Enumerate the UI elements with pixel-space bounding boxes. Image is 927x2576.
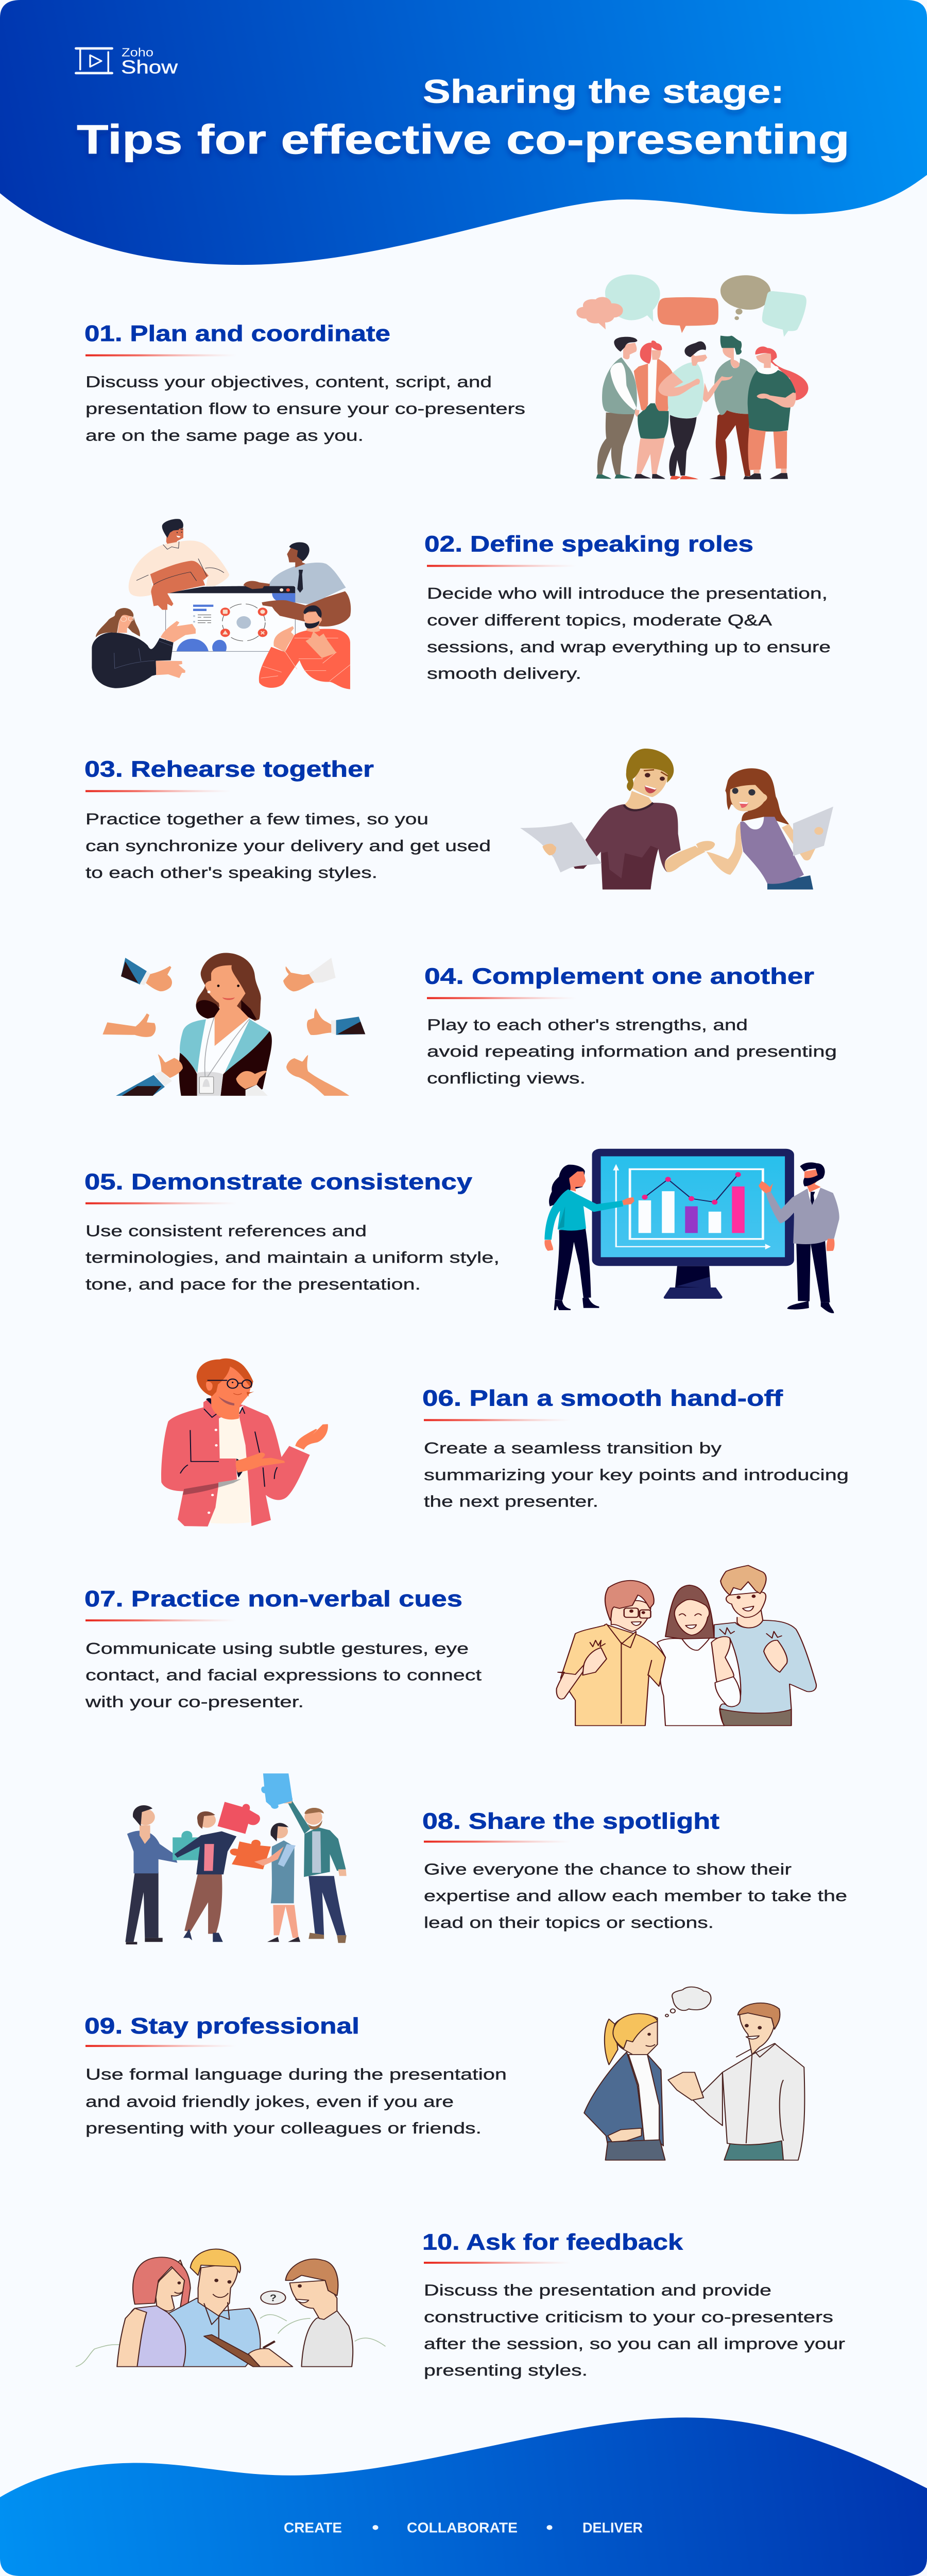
body text 09: and avoid friendly jokes, even if you are — [85, 2093, 454, 2110]
illustration: two presenters at a chart monitor — [544, 1149, 839, 1313]
title — [77, 73, 850, 163]
heading 05: 05. Demonstrate consistency — [84, 1170, 472, 1194]
body text 09: Use formal language during the presentation — [85, 2065, 507, 2083]
body text 02: Decide who will introduce the presentation, — [427, 584, 828, 602]
panel: 06 plan a smooth hand-off — [161, 1359, 849, 1527]
illustration: three colleagues reviewing a clipboard — [76, 2249, 385, 2367]
body text 05: terminologies, and maintain a uniform style, — [85, 1248, 500, 1266]
body text 06 — [424, 1439, 849, 1510]
body text 06: Create a seamless transition by — [424, 1439, 722, 1456]
footer wave panel — [0, 2417, 927, 2576]
panel: 08 share the spotlight — [125, 1773, 847, 1944]
illustration: three colleagues reviewing a clipboard: ? — [270, 2293, 277, 2303]
body text 01: Discuss your objectives, content, script, and — [85, 373, 492, 391]
heading 07: 07. Practice non-verbal cues — [84, 1586, 462, 1611]
body text 02 — [427, 584, 831, 682]
footer tagline: DELIVER — [582, 2520, 643, 2536]
illustration: woman surrounded by thumbs up — [102, 953, 365, 1096]
heading 09: 09. Stay professional — [84, 2013, 359, 2038]
footer tagline: COLLABORATE — [407, 2520, 518, 2536]
illustration: group talking with speech bubbles — [576, 275, 809, 480]
body text 10: Discuss the presentation and provide — [424, 2281, 771, 2299]
heading 08: 08. Share the spotlight — [422, 1809, 719, 1834]
heading 04: 04. Complement one another — [424, 964, 814, 989]
body text 04 — [427, 1016, 837, 1087]
heading 10: 10. Ask for feedback — [422, 2230, 683, 2255]
body text 07: Communicate using subtle gestures, eye — [85, 1639, 469, 1657]
panel: 04 complement one another — [102, 953, 837, 1096]
body text 02: sessions, and wrap everything up to ensure — [427, 638, 831, 655]
body text 05: Use consistent references and — [85, 1222, 367, 1240]
logo: Zoho Show: Zoho — [122, 46, 153, 59]
body text 07: with your co-presenter. — [85, 1693, 304, 1710]
body text 10: constructive criticism to your co-presenters — [424, 2308, 833, 2326]
heading 02: 02. Define speaking roles — [424, 532, 753, 556]
body text 02: cover different topics, moderate Q&A — [427, 611, 772, 629]
body text 03: to each other's speaking styles. — [85, 863, 377, 881]
footer tagline — [284, 2520, 643, 2536]
body text 01: presentation flow to ensure your co-presenters — [85, 400, 525, 417]
body text 02: smooth delivery. — [427, 665, 581, 682]
body text 03: can synchronize your delivery and get used — [85, 837, 491, 854]
body text 03: Practice together a few times, so you — [85, 810, 428, 828]
panel: 02 define speaking roles — [92, 519, 831, 689]
title: Sharing the stage: — [423, 73, 784, 110]
illustration: presenter with glasses gesturing — [161, 1359, 328, 1527]
body text 04: Play to each other's strengths, and — [427, 1016, 748, 1033]
title: Tips for effective co-presenting — [77, 117, 850, 163]
panel: 01 plan and coordinate — [84, 275, 809, 480]
body text 03 — [85, 810, 491, 881]
body text 05 — [85, 1222, 500, 1293]
heading 01: 01. Plan and coordinate — [84, 321, 390, 346]
body text 09 — [85, 2065, 507, 2137]
body text 04: conflicting views. — [427, 1069, 586, 1087]
illustration: two presenters with scripts — [520, 749, 833, 890]
body text 10: presenting styles. — [424, 2361, 588, 2379]
logo: Zoho Show — [75, 46, 178, 78]
panel: 05 demonstrate consistency — [84, 1149, 839, 1313]
illustration: four people around a slide window — [92, 519, 351, 689]
panel: 03 rehearse together — [84, 749, 833, 890]
body text 08: expertise and allow each member to take the — [424, 1887, 847, 1905]
body text 06: the next presenter. — [424, 1493, 598, 1510]
heading 03: 03. Rehearse together — [84, 757, 374, 782]
heading 06: 06. Plan a smooth hand-off — [422, 1386, 783, 1411]
body text 08: Give everyone the chance to show their — [424, 1860, 792, 1878]
body text 05: tone, and pace for the presentation. — [85, 1275, 421, 1293]
header wave panel — [0, 0, 927, 265]
body text 06: summarizing your key points and introducing — [424, 1466, 849, 1483]
body text 10 — [424, 2281, 845, 2379]
body text 08 — [424, 1860, 847, 1931]
illustration: three friends cheering — [557, 1565, 816, 1725]
body text 09: presenting with your colleagues or friends. — [85, 2119, 482, 2137]
illustration: team assembling puzzle pieces — [125, 1773, 347, 1944]
body text 07 — [85, 1639, 482, 1710]
illustration: woman and man in conversation with thought bubble — [584, 1987, 804, 2160]
body text 10: after the session, so you can all improve your — [424, 2335, 845, 2352]
body text 07: contact, and facial expressions to connect — [85, 1666, 482, 1684]
body text 04: avoid repeating information and presenting — [427, 1042, 837, 1060]
logo: Zoho Show: Show — [121, 57, 178, 78]
panel: 09 stay professional — [84, 1987, 804, 2160]
body text 08: lead on their topics or sections. — [424, 1913, 714, 1931]
panel: 07 practice non-verbal cues — [84, 1565, 816, 1725]
body text 01: are on the same page as you. — [85, 427, 364, 444]
panel: 10 ask for feedback — [76, 2230, 845, 2379]
footer tagline: CREATE — [284, 2520, 342, 2536]
body text 01 — [85, 373, 525, 444]
